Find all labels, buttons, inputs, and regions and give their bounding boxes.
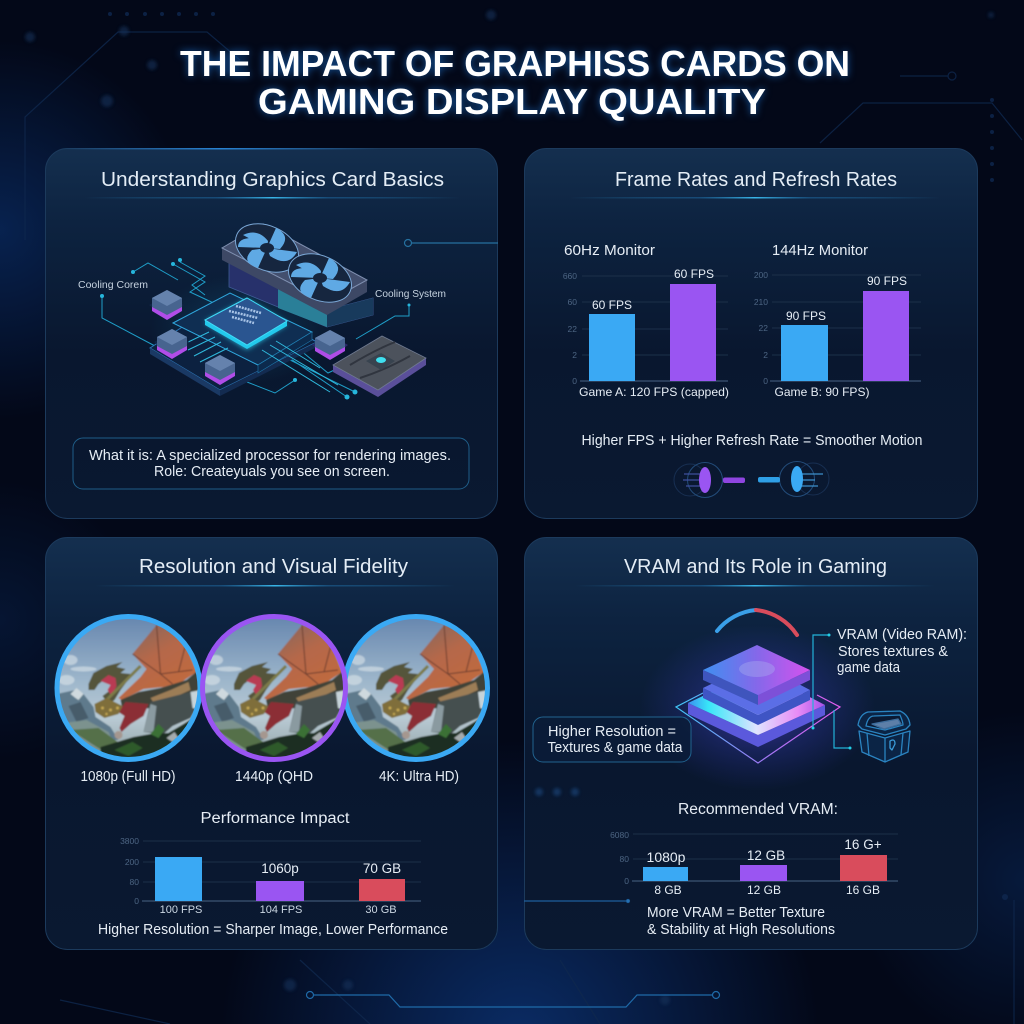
decorative dots: [535, 788, 579, 796]
heading: basics: Understanding Graphics Card Basics: [101, 169, 444, 191]
text: VRAM definition: Stores textures &: [838, 644, 948, 660]
bar chart: 144Hz: 90 FPS: [867, 274, 907, 288]
bar chart: performance: [120, 836, 421, 916]
callout: higher resolution: [533, 717, 691, 762]
bar chart: recommended VRAM: [610, 830, 898, 897]
heading: resolution: Resolution and Visual Fidelity: [139, 556, 408, 578]
label: 4K: 4K: Ultra HD): [379, 769, 459, 785]
bar chart: recommended VRAM: 12 GB: [747, 848, 785, 863]
label: 1440p: 1440p (QHD: [235, 769, 313, 785]
bar chart: 60Hz: 60: [568, 297, 577, 307]
bar chart: 60Hz: [563, 267, 729, 399]
panel: graphics card basics: [46, 148, 498, 518]
takeaway: more VRAM: More VRAM = Better Texture: [647, 905, 825, 921]
text: VRAM definition: VRAM (Video RAM):: [837, 627, 967, 643]
bar chart: 60Hz: 60 FPS: [592, 298, 632, 312]
bar chart: performance: 80: [130, 877, 139, 887]
label: 60Hz monitor: 60Hz Monitor: [564, 242, 655, 259]
icon: VRAM chip stack: [640, 610, 875, 790]
bar chart: performance: 200: [125, 857, 139, 867]
bar chart: 144Hz: 0: [763, 376, 768, 386]
connector line: [524, 900, 630, 902]
bar chart: performance: 0: [134, 896, 139, 906]
heading: performance impact: Performance Impact: [200, 810, 350, 827]
icon: treasure chest: [858, 711, 910, 762]
takeaway: more VRAM: [647, 905, 835, 938]
connector lines: [813, 635, 850, 748]
connector node: [404, 240, 498, 246]
bar chart: performance: 3800: [120, 836, 139, 846]
callout: what it is: Role: Createyuals you see on screen.: [154, 464, 390, 480]
bar chart: 60Hz: 0: [572, 376, 577, 386]
bar chart: 144Hz: 2: [763, 350, 768, 360]
label: 1080p: 1080p (Full HD): [80, 769, 176, 785]
image: 1440p dragon: [200, 614, 348, 762]
bar chart: recommended VRAM: 0: [624, 876, 629, 886]
title: [180, 43, 850, 122]
bar chart: performance: 104 FPS: [260, 904, 302, 916]
takeaway: smoother motion: Higher FPS + Higher Refresh Rate = Smoother Motion: [582, 433, 922, 449]
title: THE IMPACT OF GRAPHISS CARDS ON: [180, 43, 850, 84]
bar chart: recommended VRAM: 12 GB: [747, 883, 781, 897]
bar chart: 144Hz: Game B: 90 FPS): [774, 385, 870, 399]
bar chart: performance: 100 FPS: [160, 904, 202, 916]
takeaway: resolution tradeoff: Higher Resolution = Sharper Image, Lower Performance: [98, 922, 448, 938]
bar chart: 144Hz: 90 FPS: [786, 309, 826, 323]
bar chart: performance: 30 GB: [365, 904, 397, 916]
bar chart: recommended VRAM: 80: [620, 854, 629, 864]
bar chart: performance: 70 GB: [363, 861, 401, 876]
icon: graphics card exploded diagram: [100, 214, 426, 400]
callout: higher resolution: Textures & game data: [548, 740, 683, 756]
bar chart: recommended VRAM: 8 GB: [654, 883, 682, 897]
bar chart: 144Hz: 210: [754, 297, 768, 307]
takeaway: more VRAM: & Stability at High Resolutions: [647, 922, 835, 938]
bar chart: 144Hz: 22: [759, 323, 768, 333]
icon: motion comparison: [674, 462, 829, 498]
panel: frame rates and refresh rates: [524, 148, 978, 518]
text: VRAM definition: game data: [837, 660, 901, 676]
label: cooling corem: Cooling Corem: [78, 280, 148, 291]
panel: VRAM: [524, 538, 978, 950]
text: VRAM definition: [837, 627, 967, 676]
label: cooling system: Cooling System: [375, 289, 446, 300]
title: GAMING DISPLAY QUALITY: [258, 81, 766, 122]
bar chart: recommended VRAM: 6080: [610, 830, 629, 840]
bar chart: 144Hz: 200: [754, 270, 768, 280]
heading: recommended VRAM: Recommended VRAM:: [678, 801, 838, 818]
heading: VRAM: VRAM and Its Role in Gaming: [624, 556, 887, 578]
label: 144Hz monitor: 144Hz Monitor: [772, 242, 868, 259]
callout: what it is: [73, 438, 469, 489]
bar chart: 60Hz: 2: [572, 350, 577, 360]
bar chart: recommended VRAM: 16 G+: [844, 837, 882, 852]
bar chart: 60Hz: 22: [568, 324, 577, 334]
heading: frame rates: Frame Rates and Refresh Rates: [615, 169, 897, 191]
bar chart: 60Hz: Game A: 120 FPS (capped): [579, 385, 729, 399]
image: 1080p dragon: [54, 614, 202, 762]
bar chart: 144Hz: [754, 270, 921, 399]
bar chart: recommended VRAM: 1080p: [647, 849, 686, 865]
image: 4K dragon: [342, 614, 490, 762]
bar chart: 60Hz: 60 FPS: [674, 267, 714, 281]
connector dots: [812, 634, 852, 750]
footer circuit connector: [306, 992, 720, 1007]
callout: what it is: What it is: A specialized processor for rendering images.: [89, 448, 451, 464]
bar chart: performance: 1060p: [261, 861, 299, 876]
callout: higher resolution: Higher Resolution =: [548, 724, 676, 740]
bar chart: 60Hz: 660: [563, 271, 577, 281]
panel: resolution and visual fidelity: [46, 538, 498, 950]
bar chart: recommended VRAM: 16 GB: [846, 883, 880, 897]
